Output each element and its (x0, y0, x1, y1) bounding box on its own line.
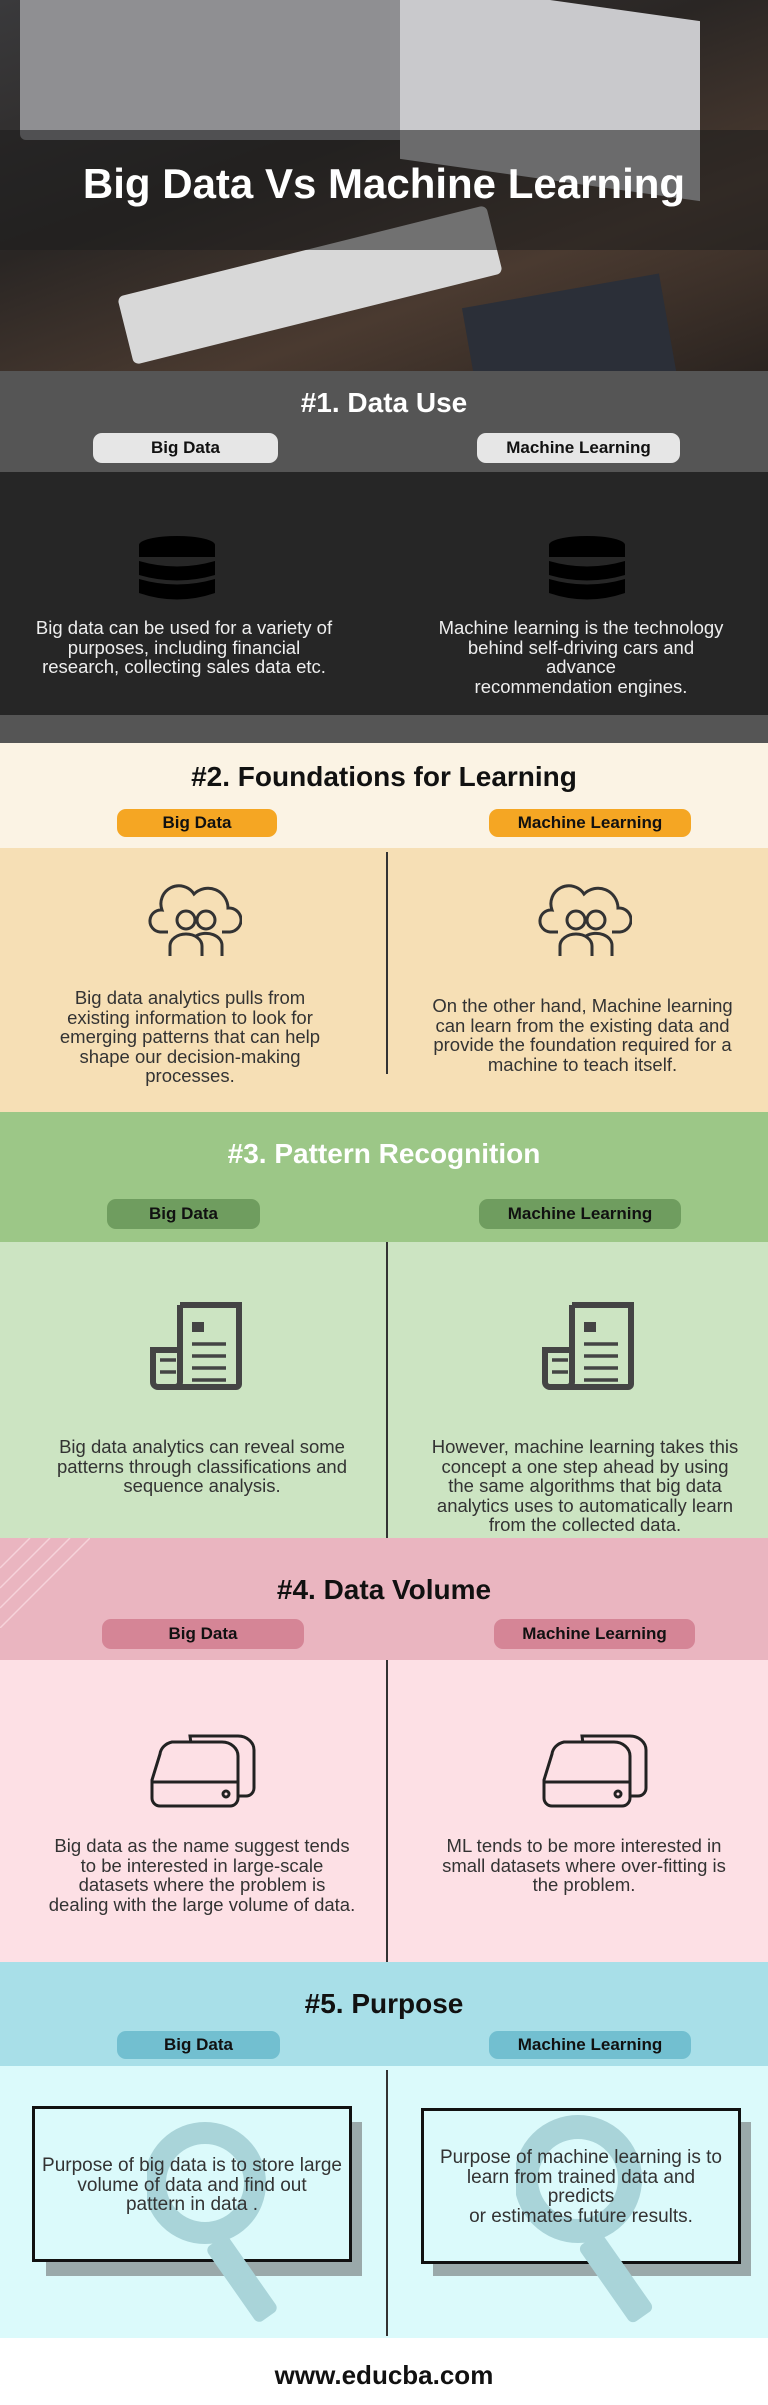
text right: small datasets where over-fitting is (442, 1854, 726, 1876)
text left: patterns through classifications and (57, 1456, 347, 1476)
pill: machine learning: Machine Learning (506, 438, 651, 457)
section 4: data volume (0, 1538, 768, 1962)
text left: Big data analytics pulls from (75, 987, 305, 1008)
text right: the same algorithms that big data (448, 1475, 722, 1496)
content panel (0, 2066, 768, 2338)
text: or estimates future results. (469, 2206, 693, 2226)
text left: existing information to look for (67, 1006, 313, 1028)
text right: recommendation engines. (475, 676, 687, 696)
text right: behind self-driving cars and (468, 636, 694, 658)
text right: advance (546, 656, 616, 677)
content panel (0, 848, 768, 1112)
section 2: foundations (0, 743, 768, 1112)
right box with magnifier (421, 2108, 751, 2322)
text left: Big data as the name suggest tends (54, 1835, 350, 1856)
pill: machine learning (489, 809, 691, 837)
pill: big data: Big Data (169, 1624, 237, 1643)
text right: On the other hand, Machine learning (432, 995, 733, 1016)
icon: document left (150, 1302, 242, 1390)
icon: drives left (150, 1734, 256, 1808)
keyboard (117, 205, 503, 365)
text left: datasets where the problem is (79, 1874, 325, 1895)
laptop screen (400, 0, 700, 201)
text: learn from trained data and (467, 2166, 695, 2188)
text right: analytics uses to automatically learn (437, 1494, 733, 1516)
icon: database right (549, 536, 625, 600)
pill: big data (102, 1619, 304, 1649)
text: Purpose of big data is to store large (42, 2155, 342, 2176)
text left: Big data analytics can reveal some (59, 1436, 345, 1457)
heading: #2. Foundations for Learning (191, 761, 577, 792)
text right (442, 1835, 726, 1895)
pill: machine learning (494, 1619, 695, 1649)
content panel (0, 472, 768, 715)
tablet (462, 273, 678, 417)
pill: big data (117, 2031, 280, 2059)
icon: drives right (542, 1734, 648, 1808)
text left: sequence analysis. (123, 1475, 281, 1496)
text (440, 2147, 722, 2226)
text right: machine to teach itself. (488, 1054, 677, 1074)
text right: concept a one step ahead by using (442, 1456, 728, 1476)
heading: #5. Purpose (305, 1988, 463, 2019)
text right: provide the foundation required for a (433, 1034, 732, 1055)
text: Purpose of machine learning is to (440, 2147, 722, 2168)
text right: from the collected data. (489, 1514, 681, 1535)
text left: research, collecting sales data etc. (42, 656, 326, 677)
text left (49, 1835, 355, 1915)
text left: dealing with the large volume of data. (49, 1894, 355, 1914)
text right: the problem. (533, 1874, 635, 1895)
text left: shape our decision-making (79, 1046, 301, 1066)
pill: big data: Big Data (149, 1204, 218, 1223)
text left (57, 1436, 347, 1496)
pill: machine learning (489, 2031, 691, 2059)
text right (432, 1436, 738, 1535)
footer url: www.educba.com (275, 2360, 493, 2390)
pill: big data: Big Data (163, 813, 231, 832)
text (42, 2155, 342, 2215)
section 1: data use (0, 371, 768, 743)
text left (36, 617, 332, 677)
text left: emerging patterns that can help (60, 1026, 320, 1047)
text left: purposes, including financial (68, 636, 300, 658)
pill: machine learning (479, 1199, 681, 1229)
text left: processes. (145, 1065, 235, 1086)
text right: ML tends to be more interested in (447, 1835, 721, 1856)
pill: big data (117, 809, 277, 837)
title band (0, 130, 768, 250)
icon: database left (139, 536, 215, 600)
text right: can learn from the existing data and (435, 1014, 730, 1036)
pill: machine learning: Machine Learning (518, 2035, 662, 2054)
pill: machine learning (477, 433, 680, 463)
content panel (0, 1242, 768, 1538)
section 5: purpose (0, 1962, 768, 2338)
text right (432, 995, 733, 1074)
heading: #1. Data Use (301, 387, 467, 418)
pill: big data: Big Data (151, 438, 220, 457)
text right: However, machine learning takes this (432, 1436, 738, 1457)
heading: #4. Data Volume (277, 1574, 491, 1605)
pill: big data (107, 1199, 260, 1229)
text left (60, 987, 320, 1086)
content panel (0, 1660, 768, 1962)
header photo (0, 0, 768, 371)
text right (439, 617, 724, 697)
pill: machine learning: Machine Learning (518, 813, 662, 832)
text right: Machine learning is the technology (439, 617, 723, 638)
left box with magnifier (32, 2106, 362, 2322)
text left: Big data can be used for a variety of (36, 617, 332, 638)
text: volume of data and find out (77, 2174, 307, 2196)
section 3: pattern recognition (0, 1112, 768, 1538)
pill: machine learning: Machine Learning (522, 1624, 667, 1643)
main title: Big Data Vs Machine Learning (83, 160, 685, 207)
icon: document right (542, 1302, 634, 1390)
text: predicts (548, 2186, 614, 2207)
monitor (20, 0, 460, 140)
text: pattern in data . (126, 2194, 258, 2215)
pill: big data (93, 433, 278, 463)
pill: machine learning: Machine Learning (508, 1204, 652, 1223)
icon: cloud people left (148, 884, 242, 956)
icon: cloud people right (538, 884, 632, 956)
text left: to be interested in large-scale (81, 1854, 323, 1876)
pill: big data: Big Data (164, 2035, 233, 2054)
heading: #3. Pattern Recognition (228, 1138, 540, 1169)
